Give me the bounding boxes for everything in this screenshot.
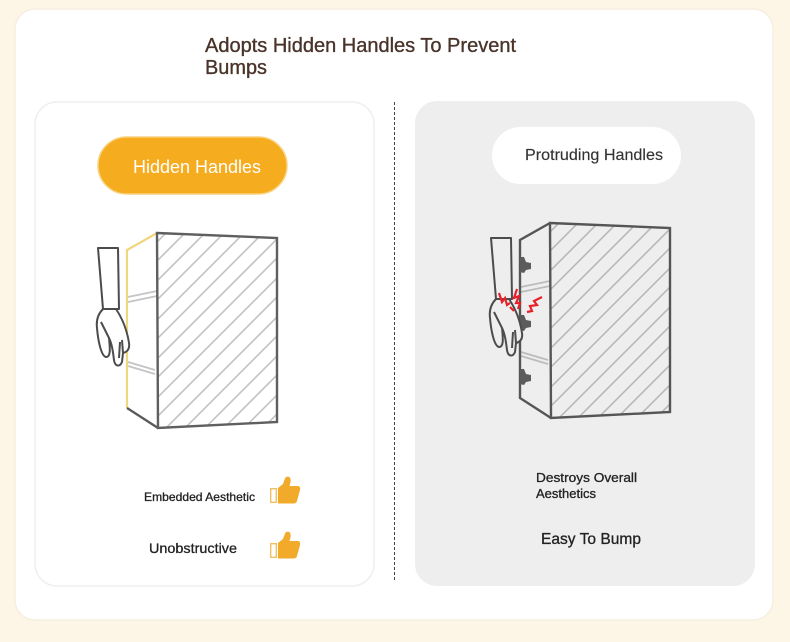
icon: red impact marks — [499, 289, 542, 312]
icon: thumbs up — [271, 477, 300, 504]
illustration: cabinet with hidden handles — [96, 232, 278, 430]
title: Adopts Hidden Handles To Prevent — [205, 35, 516, 57]
label: destroys overall aesthetics: Aesthetics — [536, 486, 596, 501]
pill: hidden handles: Hidden Handles — [133, 157, 261, 177]
icon: arm and hand — [490, 238, 522, 356]
label: easy to bump: Easy To Bump — [541, 531, 641, 548]
illustration: cabinet with protruding handles — [488, 222, 672, 420]
title: Bumps — [205, 57, 267, 79]
label: embedded aesthetic: Embedded Aesthetic — [144, 490, 255, 504]
label: unobstructive: Unobstructive — [149, 540, 237, 556]
pill: protruding handles: Protruding Handles — [525, 147, 663, 164]
icon: protruding knobs — [520, 257, 531, 385]
pill: hidden handles — [98, 137, 287, 194]
label: destroys overall aesthetics: Destroys Overall — [536, 470, 637, 485]
label: destroys overall aesthetics — [536, 470, 637, 501]
icon: thumbs up — [271, 532, 300, 558]
icon: arm and hand — [97, 248, 129, 366]
pill: protruding handles — [492, 127, 681, 184]
panel: hidden handles — [35, 99, 374, 586]
title — [205, 35, 516, 79]
panel: protruding handles — [415, 89, 755, 586]
